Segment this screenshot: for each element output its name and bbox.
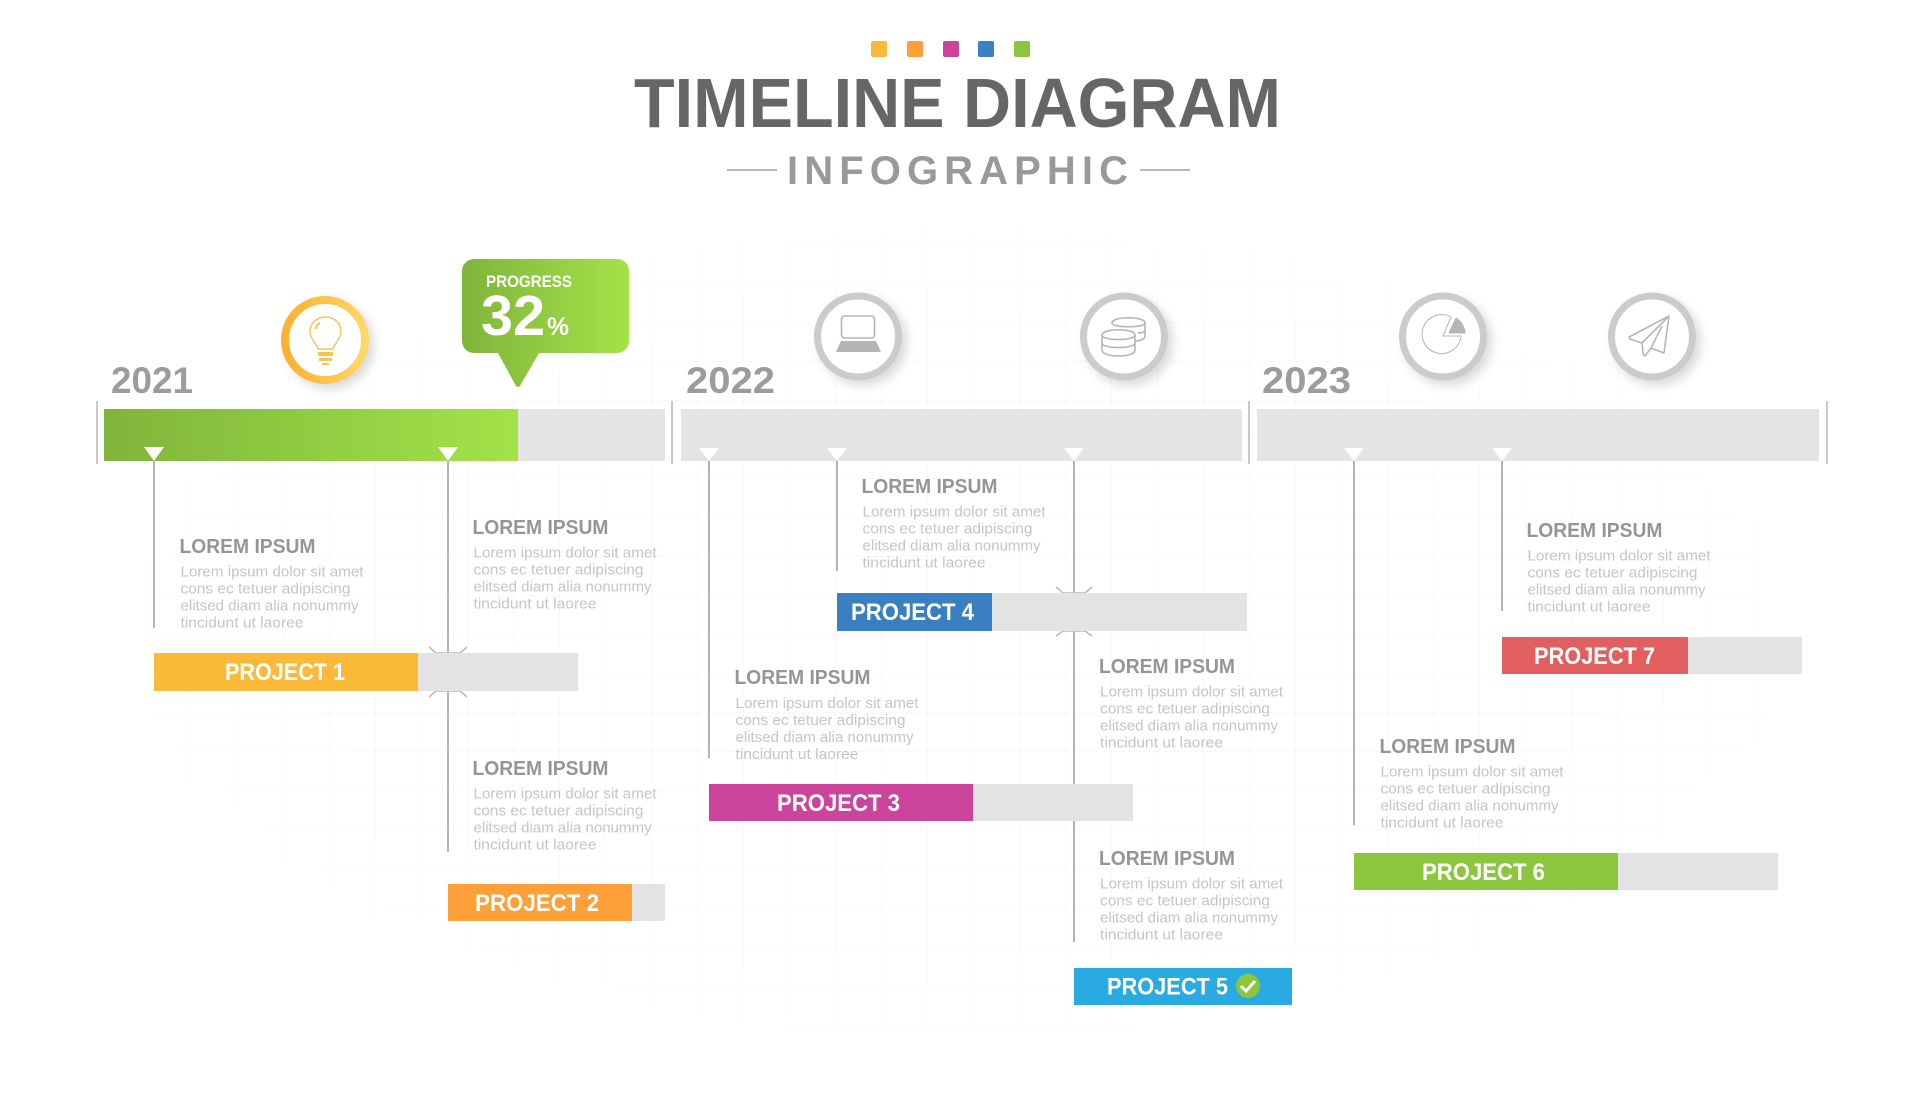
text block 7 <box>1099 848 1284 944</box>
text block 5: cons ec tetuer adipiscing <box>862 520 1032 538</box>
text block 1: cons ec tetuer adipiscing <box>180 580 350 598</box>
text block 2: cons ec tetuer adipiscing <box>474 562 644 578</box>
text block 3: Lorem ipsum dolor sit amet <box>474 786 657 802</box>
project 1 bar <box>154 647 578 697</box>
text block 7: cons ec tetuer adipiscing <box>1100 892 1270 910</box>
text block 3: cons ec tetuer adipiscing <box>474 802 644 820</box>
text block 2: Lorem ipsum dolor sit amet <box>474 544 657 562</box>
text block 5: LOREM IPSUM <box>862 476 998 498</box>
progress callout <box>462 259 629 387</box>
project 1 bar: PROJECT 1 <box>225 659 345 686</box>
text block 6: cons ec tetuer adipiscing <box>1100 700 1270 718</box>
text block 7: Lorem ipsum dolor sit amet <box>1100 876 1284 892</box>
progress callout: 32 <box>481 284 545 348</box>
text block 7: elitsed diam alia nonummy <box>1100 910 1278 926</box>
project 6 bar: PROJECT 6 <box>1422 859 1545 886</box>
text block 1: Lorem ipsum dolor sit amet <box>180 564 364 580</box>
text block 8: tincidunt ut laoree <box>1380 814 1504 832</box>
project 5 bar with check <box>1074 968 1292 1005</box>
text block 2: tincidunt ut laoree <box>474 596 596 612</box>
text block 4 <box>734 667 919 763</box>
project 2 bar <box>448 884 665 921</box>
text block 4: cons ec tetuer adipiscing <box>736 712 906 729</box>
text block 1: LOREM IPSUM <box>180 536 316 558</box>
project 5 bar with check: PROJECT 5 <box>1107 974 1228 1000</box>
text block 8: cons ec tetuer adipiscing <box>1380 780 1550 798</box>
text block 2: LOREM IPSUM <box>472 517 608 539</box>
text block 1: elitsed diam alia nonummy <box>180 598 359 614</box>
text block 9: cons ec tetuer adipiscing <box>1528 564 1698 582</box>
project 7 bar: PROJECT 7 <box>1534 643 1655 670</box>
text block 6 <box>1099 656 1284 752</box>
timeline markers <box>144 447 1512 461</box>
icon: coins <box>1084 296 1164 377</box>
text block 6: tincidunt ut laoree <box>1100 734 1223 752</box>
text block 2: elitsed diam alia nonummy <box>474 578 652 596</box>
text block 9: Lorem ipsum dolor sit amet <box>1528 548 1711 564</box>
text block 9: tincidunt ut laoree <box>1528 598 1650 616</box>
icon: laptop <box>818 296 898 377</box>
project 6 bar <box>1354 853 1778 890</box>
colour dots <box>871 41 1030 57</box>
project 4 bar <box>837 587 1247 636</box>
text block 8: LOREM IPSUM <box>1380 736 1516 758</box>
progress callout: % <box>547 313 569 341</box>
text block 5 <box>862 476 1046 572</box>
progress callout: PROGRESS <box>486 272 572 291</box>
text block 3 <box>472 758 657 854</box>
text block 6: elitsed diam alia nonummy <box>1100 718 1278 734</box>
text block 4: LOREM IPSUM <box>734 667 870 689</box>
text block 5: elitsed diam alia nonummy <box>862 538 1041 554</box>
timeline bar with year segments <box>97 401 1827 464</box>
icon: pie chart <box>1402 296 1484 377</box>
text block 5: Lorem ipsum dolor sit amet <box>862 504 1046 520</box>
text block 8 <box>1380 736 1564 832</box>
connector lines <box>154 461 1502 942</box>
text block 6: Lorem ipsum dolor sit amet <box>1100 684 1284 700</box>
text block 6: LOREM IPSUM <box>1099 656 1235 678</box>
text block 3: tincidunt ut laoree <box>474 836 596 854</box>
text block 5: tincidunt ut laoree <box>862 554 986 572</box>
text block 7: tincidunt ut laoree <box>1100 926 1223 944</box>
project 3 bar <box>709 784 1133 821</box>
title: TIMELINE DIAGRAM <box>634 64 1281 142</box>
icon: light bulb <box>285 300 365 380</box>
text block 1: tincidunt ut laoree <box>180 614 304 632</box>
text block 9: LOREM IPSUM <box>1526 520 1662 542</box>
text block 9 <box>1526 520 1711 616</box>
icon: paper plane <box>1612 296 1692 377</box>
text block 9: elitsed diam alia nonummy <box>1528 582 1706 598</box>
project 4 bar: PROJECT 4 <box>851 599 975 626</box>
text block 1 <box>180 536 364 632</box>
text block 7: LOREM IPSUM <box>1099 848 1235 870</box>
year 2022: 2022 <box>686 360 775 401</box>
text block 2 <box>472 517 657 612</box>
text block 8: Lorem ipsum dolor sit amet <box>1380 764 1564 780</box>
text block 4: elitsed diam alia nonummy <box>736 729 914 746</box>
subtitle: INFOGRAPHIC <box>787 149 1128 193</box>
text block 3: elitsed diam alia nonummy <box>474 820 652 836</box>
text block 8: elitsed diam alia nonummy <box>1380 798 1559 814</box>
text block 4: Lorem ipsum dolor sit amet <box>736 695 919 712</box>
text block 4: tincidunt ut laoree <box>736 746 858 763</box>
text block 3: LOREM IPSUM <box>472 758 608 780</box>
project 7 bar <box>1502 637 1802 674</box>
year 2021: 2021 <box>111 360 193 401</box>
year 2023: 2023 <box>1262 360 1351 401</box>
project 3 bar: PROJECT 3 <box>777 790 900 817</box>
project 2 bar: PROJECT 2 <box>475 890 599 917</box>
